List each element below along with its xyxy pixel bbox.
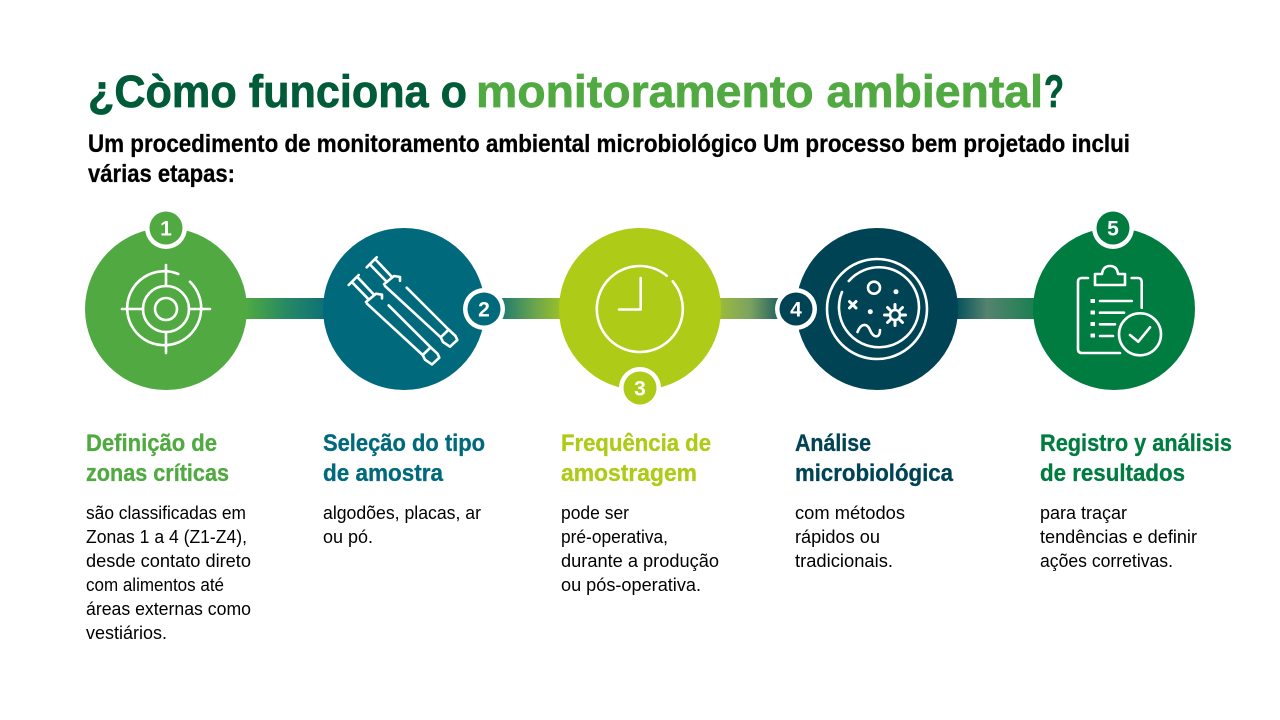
title [88, 66, 1064, 117]
text: step 2 [323, 502, 481, 547]
heading: step 5: Registro y análisis [1040, 430, 1232, 457]
heading: step 2: de amostra [323, 460, 444, 487]
heading: step 1: Definição de [86, 430, 217, 457]
badge 2 [463, 288, 505, 330]
badge 5 [1092, 207, 1134, 249]
text: step 1: desde contato direto [86, 550, 251, 571]
text: step 5: tendências e definir [1040, 526, 1197, 547]
text: step 1: com alimentos até [86, 574, 224, 595]
subtitle: Um procedimento de monitoramento ambiental microbiológico Um processo bem projetado inclui [88, 130, 1130, 158]
heading: step 4 [795, 430, 954, 487]
connector 4 to 5 [955, 298, 1035, 319]
icon: target [122, 265, 210, 353]
badge 4 [775, 288, 817, 330]
heading: step 2 [323, 430, 485, 487]
badge 1 [145, 207, 187, 249]
title: monitoramento ambiental [476, 66, 1043, 117]
icon: clock [597, 266, 683, 352]
heading: step 4: Análise [795, 430, 871, 457]
text: step 3: pré-operativa, [561, 526, 668, 547]
step 4 circle [775, 228, 958, 390]
icon: swabs [349, 257, 457, 364]
text: step 2: ou pó. [323, 526, 373, 547]
text: step 3: ou pós-operativa. [561, 574, 701, 595]
text: step 4: rápidos ou [795, 526, 880, 547]
text: step 4 [795, 502, 905, 571]
heading: step 3 [561, 430, 711, 487]
connector 1 to 2 [245, 298, 325, 319]
badge 3 [619, 367, 661, 409]
heading: step 5: de resultados [1040, 460, 1185, 487]
text: step 5: ações corretivas. [1040, 550, 1173, 571]
badge 4: 4 [790, 298, 802, 322]
badge 3: 3 [634, 378, 646, 400]
icon: petri dish [827, 259, 927, 359]
step 3 circle [559, 228, 721, 409]
connector 3 to 4 [719, 298, 781, 319]
icon: clipboard [1078, 266, 1161, 355]
heading: step 1 [86, 430, 229, 487]
text: step 1: Zonas 1 a 4 (Z1-Z4), [86, 526, 247, 547]
text: step 1: áreas externas como [86, 598, 251, 619]
subtitle [88, 130, 1130, 188]
badge 2: 2 [478, 298, 490, 322]
connector 2 to 3 [500, 298, 562, 319]
badge 5: 5 [1107, 218, 1119, 240]
text: step 1: são classificadas em [86, 502, 246, 523]
title: ¿Còmo funciona o [88, 66, 467, 117]
text: step 1: vestiários. [86, 622, 167, 643]
text: step 4: com métodos [795, 502, 905, 523]
text: step 5 [1040, 502, 1197, 571]
text: step 2: algodões, placas, ar [323, 502, 481, 523]
heading: step 2: Seleção do tipo [323, 430, 485, 457]
subtitle: várias etapas: [88, 160, 235, 188]
text: step 3: pode ser [561, 502, 629, 523]
text: step 3 [561, 502, 719, 595]
title: ? [1044, 66, 1064, 117]
heading: step 1: zonas críticas [86, 460, 229, 487]
badge 1: 1 [160, 218, 172, 240]
step 5 circle [1033, 207, 1195, 390]
heading: step 4: microbiológica [795, 460, 954, 487]
text: step 3: durante a produção [561, 550, 719, 571]
text: step 1 [86, 502, 251, 643]
step 2 circle [323, 228, 505, 390]
step 1 circle [85, 207, 247, 390]
heading: step 3: Frequência de [561, 430, 711, 457]
text: step 4: tradicionais. [795, 550, 893, 571]
heading: step 5 [1040, 430, 1232, 487]
heading: step 3: amostragem [561, 460, 697, 487]
text: step 5: para traçar [1040, 502, 1127, 523]
